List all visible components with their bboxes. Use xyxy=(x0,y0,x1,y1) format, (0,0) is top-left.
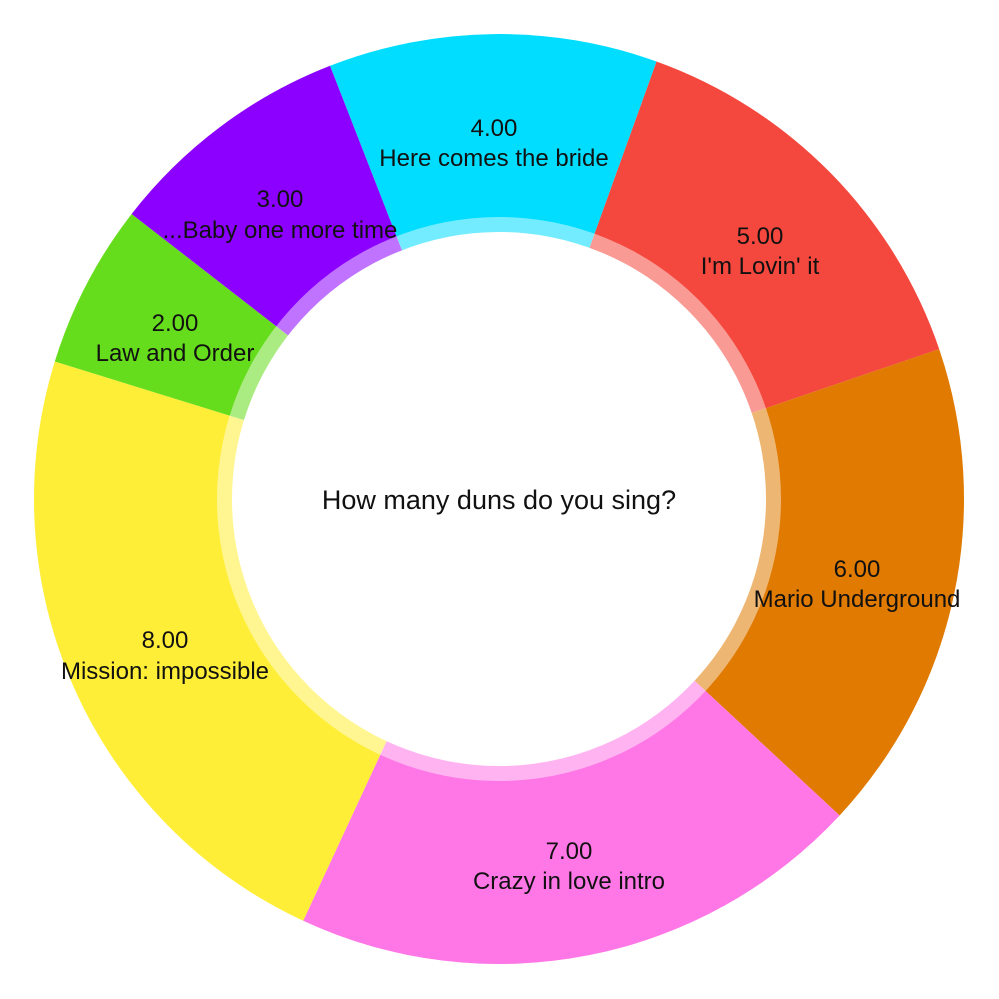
label: Mario Underground: Mario Underground xyxy=(754,586,960,613)
slice: Crazy in love intro xyxy=(303,499,840,964)
label: I'm Lovin' it: 5.00 xyxy=(737,223,783,250)
label: Crazy in love intro: 7.00 xyxy=(546,838,592,865)
label: Crazy in love intro xyxy=(473,838,665,895)
label: Law and Order xyxy=(96,310,254,367)
inner hole xyxy=(232,232,766,766)
label: Mario Underground xyxy=(754,556,960,613)
label: Mission impossible: 8.00 xyxy=(142,627,188,654)
center title: How many duns do you sing? xyxy=(322,485,676,515)
label: Law and Order: 2.00 xyxy=(152,310,198,337)
label: Mario Underground: 6.00 xyxy=(834,556,880,583)
slice: Baby one more time xyxy=(132,66,499,499)
slice: Law and Order xyxy=(55,214,499,499)
slice: Here comes the bride xyxy=(330,34,656,499)
inner light band xyxy=(217,217,781,781)
label: Here comes the bride: 4.00 xyxy=(471,115,517,142)
slice: Mario Underground xyxy=(499,349,964,816)
label: Crazy in love intro: Crazy in love intro xyxy=(473,868,665,895)
slice: I'm Lovin' it xyxy=(499,62,939,499)
label: Law and Order: Law and Order xyxy=(96,340,254,367)
label: Mission impossible xyxy=(61,627,269,685)
label: Baby one more time: ...Baby one more time xyxy=(163,217,397,244)
label: Baby one more time: 3.00 xyxy=(257,186,303,213)
label: Here comes the bride: Here comes the bride xyxy=(379,145,609,172)
label: I'm Lovin' it: I'm Lovin' it xyxy=(701,253,820,280)
label: Baby one more time xyxy=(163,186,397,244)
label: Here comes the bride xyxy=(379,115,609,172)
slice: Mission impossible xyxy=(34,362,499,921)
label: Mission impossible: Mission: impossible xyxy=(61,658,269,685)
label: I'm Lovin' it xyxy=(701,223,820,280)
